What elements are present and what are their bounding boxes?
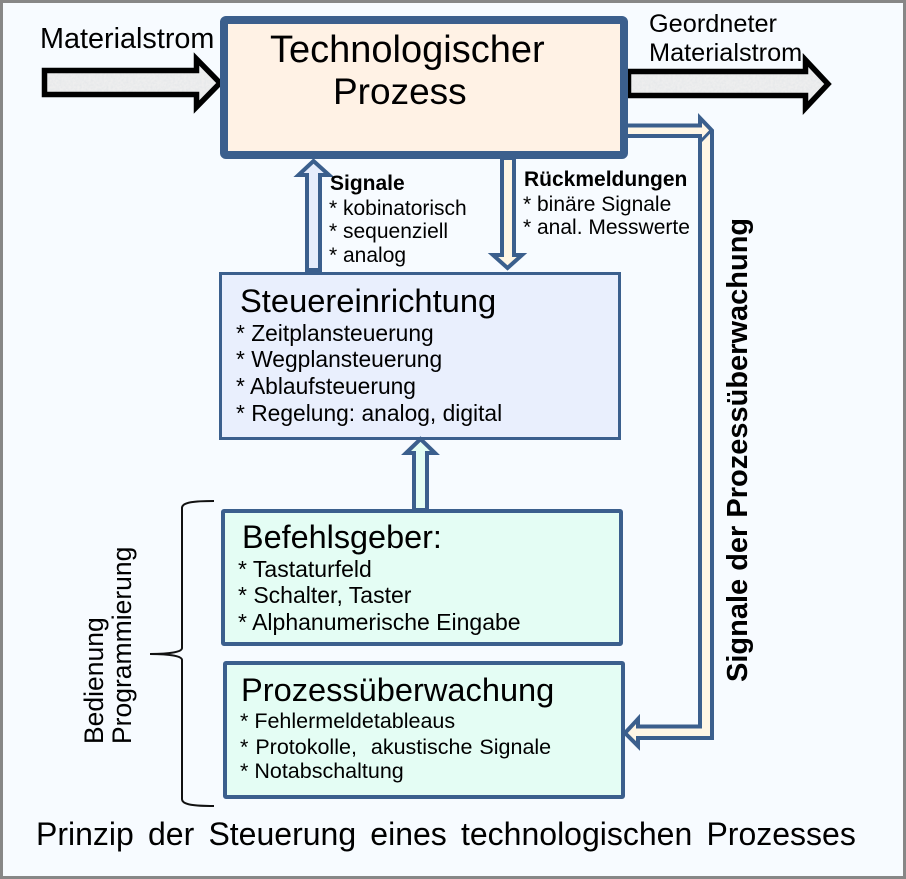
arrow: incoming material flow — [44, 59, 220, 107]
arrow: process monitoring feedback line — [622, 118, 712, 746]
panel: control unit — [220, 274, 620, 438]
vertical label: programming: Programmierung — [107, 547, 137, 744]
vertical label: operation: Bedienung — [79, 617, 109, 744]
arrow: commands up — [406, 439, 435, 510]
heading: technological process: Technologischer — [270, 29, 545, 71]
list: input devices: * Alphanumerische Eingabe — [238, 609, 521, 635]
panel: command input — [223, 511, 621, 644]
brace: operation group — [150, 501, 214, 806]
arrow: ordered material flow — [628, 60, 828, 108]
caption: Prinzip der Steuerung eines technologischen Prozesses — [36, 816, 856, 852]
text block: signals: * kobinatorisch — [329, 197, 467, 220]
arrow: feedback down — [493, 158, 522, 268]
arrow: control signals up — [298, 161, 329, 270]
label: ordered material flow: Geordneter — [649, 10, 777, 38]
list: control types: * Wegplansteuerung — [236, 346, 442, 372]
heading: control unit: Steuereinrichtung — [240, 282, 496, 319]
list: control types: * Regelung: analog, digital — [236, 400, 502, 426]
heading: process monitoring: Prozessüberwachung — [241, 671, 554, 708]
panel: process monitoring — [0, 0, 623, 797]
heading: command input: Befehlsgeber: — [242, 519, 442, 555]
vertical label: process monitoring signals: Signale der Prozessüberwachung — [722, 218, 754, 682]
text block: signals: Signale — [330, 172, 405, 195]
panel: technological process — [224, 20, 624, 155]
text block: signals: * analog — [329, 244, 406, 267]
list: input devices: * Tastaturfeld — [238, 556, 372, 582]
list: control types: * Zeitplansteuerung — [236, 320, 434, 346]
list: control types: * Ablaufsteuerung — [236, 373, 416, 399]
label: material flow in: Materialstrom — [40, 23, 214, 55]
text block: signals: * sequenziell — [329, 220, 448, 243]
text block: feedback messages: * binäre Signale — [523, 193, 671, 216]
text block: feedback messages: * anal. Messwerte — [523, 216, 690, 239]
list: monitoring outputs: * Fehlermeldetableaus — [240, 709, 455, 733]
label: ordered material flow: Materialstrom — [649, 39, 802, 67]
text block: feedback messages: Rückmeldungen — [524, 168, 687, 191]
heading: technological process: Prozess — [333, 71, 467, 112]
list: input devices: * Schalter, Taster — [238, 582, 412, 608]
list: monitoring outputs: * Notabschaltung — [240, 759, 404, 783]
list: monitoring outputs: * Protokolle, akustische Signale — [240, 735, 551, 759]
